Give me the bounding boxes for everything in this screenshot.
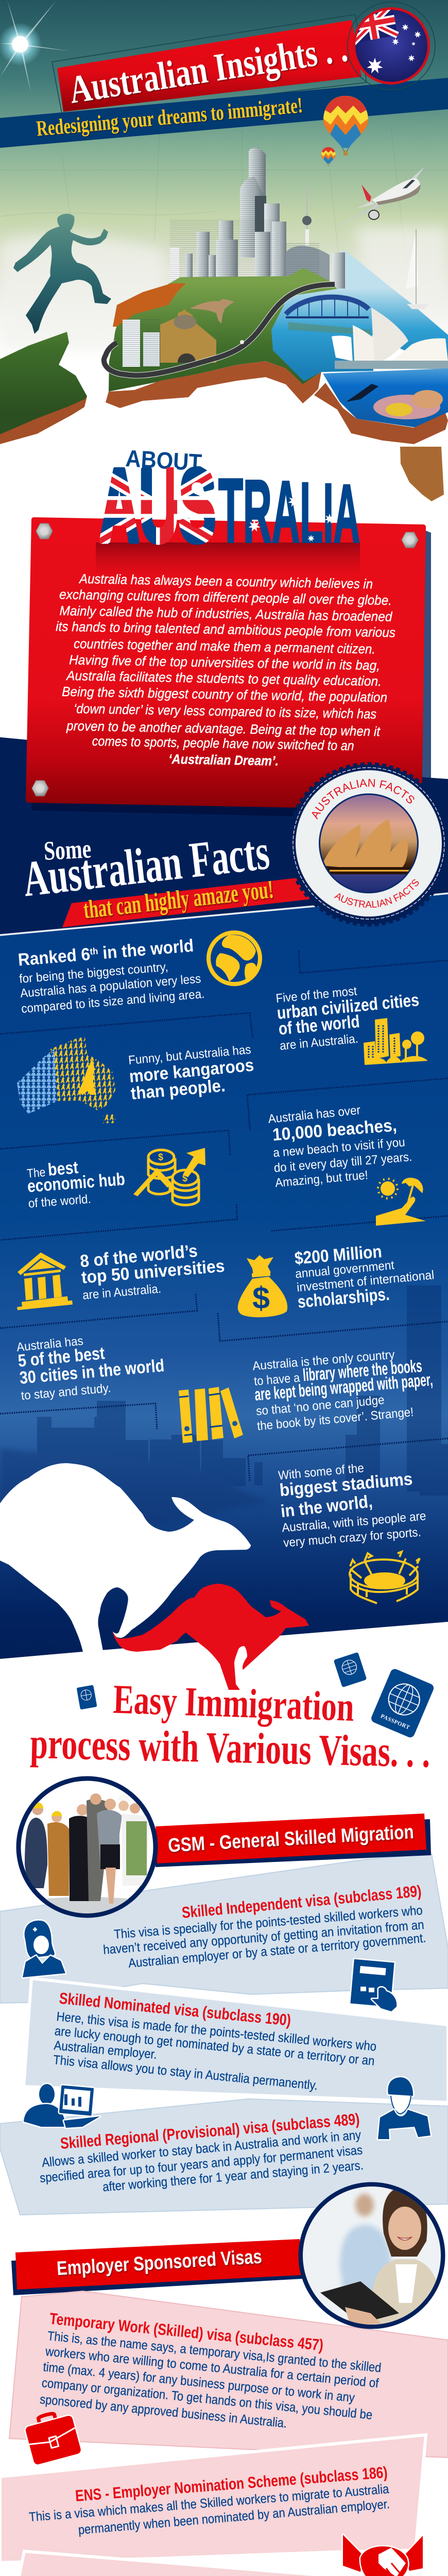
icon: coins with arrow: $	[158, 1152, 163, 1162]
about Australia paragraph: ‘down under’ is very less compared to its size, which has	[74, 701, 376, 722]
plate shadow	[31, 793, 425, 819]
icon: handshake	[343, 2535, 423, 2576]
panel: skilled nominated visa: Australian employer.	[53, 2038, 158, 2062]
icon: money bag: $	[252, 1281, 270, 1315]
subtitle text: Redesigning your dreams to immigrate!	[36, 94, 304, 141]
fact: urban cities: of the world	[278, 1012, 360, 1039]
fact: biggest stadiums: very much crazy for sports.	[283, 1526, 422, 1550]
passport icon small right	[334, 1652, 367, 1687]
fact: best economic hub: The	[26, 1165, 46, 1181]
about Australia paragraph: comes to sports, people have now switched to an	[92, 733, 354, 753]
panel: skilled nominated visa: Here, this visa is made for the points-tested skilled workers who	[56, 2009, 377, 2054]
GSM ribbon	[156, 1814, 431, 1867]
fact: biggest stadiums: in the world,	[280, 1492, 373, 1521]
fact: urban cities: are in Australia.	[279, 1032, 359, 1053]
fact: top 50 universities: are in Australia.	[82, 1282, 162, 1302]
icon: briefcase	[23, 2409, 82, 2465]
icon: stadium	[350, 1552, 420, 1603]
sun flare	[0, 0, 70, 93]
underwater reef	[323, 368, 448, 428]
icon: city	[364, 1018, 428, 1065]
fact: ranked 6th: Ranked 6	[18, 944, 96, 970]
Some: Some	[43, 834, 92, 866]
icon: books	[179, 1387, 243, 1443]
panel: temporary work visa: workers who are willing to come to Australia for a certain period of	[44, 2344, 380, 2391]
fact: 10,000 beaches: a new beach to visit if you	[272, 1136, 406, 1160]
fact: best economic hub	[26, 1148, 205, 1211]
employer circular photo: businesswoman	[301, 2184, 443, 2329]
passport icon large	[370, 1668, 435, 1739]
stamp text bottom: AUSTRALIAN FACTS	[334, 879, 419, 908]
stamp text top: AUSTRALIAN FACTS	[312, 779, 414, 819]
fact: 10,000 beaches	[267, 1103, 426, 1226]
employer sponsored ribbon	[11, 2239, 304, 2295]
title text: Australian Insights . .	[66, 26, 350, 112]
panel: about Australia text plate	[26, 517, 426, 810]
about Australia paragraph: its hands to bring talented and ambitious people from various	[56, 619, 395, 640]
fact: biggest stadiums: biggest stadiums	[279, 1469, 413, 1500]
icon: coins with arrow	[133, 1148, 205, 1205]
fact: wrapped library books: so that ‘no one can judge	[255, 1393, 385, 1418]
AUSTRALIA flag lettering: TRALIA	[218, 460, 360, 562]
about Australia paragraph: Being the sixth biggest country of the world, the population	[62, 684, 387, 705]
fact: top 50 universities	[17, 1241, 226, 1310]
about Australia paragraph: Mainly called the hub of industries, Australia has broadened	[59, 603, 393, 624]
fact: ranked 6th: in the world	[97, 936, 195, 963]
panel: ENS visa	[0, 2435, 426, 2563]
icon: nurse	[23, 1921, 65, 1977]
about Australia paragraph: countries together and make them a permanent citizen.	[74, 636, 375, 657]
icon: globe	[206, 930, 262, 986]
fact: wrapped library books: Australia is the only country	[252, 1348, 395, 1373]
red ribbon with subheading	[62, 874, 312, 927]
Sydney opera house	[332, 308, 448, 369]
Australian Facts: Australian Facts	[20, 824, 272, 907]
red title ribbon	[57, 20, 361, 112]
panel: skilled nominated visa: are lucky enough to get nominated by a state or a territory or an	[54, 2024, 375, 2069]
fact: urban cities	[275, 984, 428, 1065]
panel: RSMS visa	[0, 2551, 448, 2576]
facts heading	[20, 824, 312, 927]
fact: 200 million scholarships: scholarships.	[297, 1284, 390, 1312]
fact: best economic hub: best	[47, 1158, 79, 1180]
title band with flag	[0, 2, 448, 148]
about Australia paragraph: proven to be another advantage. Being at the top when it	[66, 718, 381, 739]
reflection of title on plate	[96, 543, 360, 580]
Tasmania	[400, 447, 444, 501]
fact: more kangaroos	[17, 1037, 255, 1123]
icon: construction worker	[378, 2077, 430, 2139]
about Australia paragraph	[56, 571, 395, 769]
fact: 10,000 beaches: 10,000 beaches,	[272, 1115, 398, 1145]
about Australia paragraph: exchanging cultures from different people all over the globe.	[59, 586, 392, 608]
stamp photo: opera house at dusk	[319, 793, 418, 894]
fact: ranked 6th	[18, 930, 262, 1016]
about Australia paragraph: Australia has always been a country which believes in	[78, 571, 373, 591]
about Australia paragraph: ‘Australian Dream’.	[168, 751, 279, 769]
red kangaroo silhouette	[113, 1584, 309, 1690]
panel: ENS visa: permanently when been nominated by an Australian employer.	[78, 2497, 390, 2537]
white kangaroo silhouette	[0, 1463, 251, 1652]
red ribbon with subheading: that can highly amaze you!	[82, 874, 275, 924]
Australia land map main piece	[104, 268, 448, 444]
fact: biggest stadiums	[278, 1461, 427, 1603]
panel: skilled nominated visa: This visa allows you to stay in Australia permanently.	[53, 2053, 318, 2093]
about Australia paragraph: Having five of the top universities of the world in its bag,	[69, 652, 380, 673]
Uluru rock	[113, 283, 186, 327]
flag badge	[348, 2, 435, 90]
panel: skilled regional visa	[0, 2099, 448, 2215]
fact: 10,000 beaches: Amazing, but true!	[274, 1168, 369, 1190]
blue subtitle band	[0, 78, 448, 148]
section heading: easy immigration	[30, 1677, 431, 1777]
bolts	[32, 523, 418, 796]
passport icon large: PASSPORT	[380, 1713, 411, 1731]
panel: temporary work visa: Temporary Work (Skilled) visa (subclass 457)	[49, 2310, 324, 2354]
fact: top 50 universities: 8 of the world’s	[79, 1241, 198, 1272]
Flinders street station	[123, 309, 216, 367]
panel: temporary work visa: This is, as the name says, a temporary visa,Is granted to the skilled	[47, 2329, 382, 2375]
employer sponsored ribbon: Employer Sponsored Visas	[56, 2246, 263, 2280]
kangaroo on grass	[190, 299, 234, 324]
panel: ENS visa: This is a visa which makes all the Skilled workers to migrate to Australia	[28, 2482, 389, 2524]
panel: temporary work visa: sponsored by any approved business in Australia.	[39, 2392, 287, 2431]
panel: skilled regional visa: Allows a skilled worker to stay back in Australia and work in any	[41, 2128, 362, 2170]
fact: biggest stadiums: Australia, with its people are	[281, 1509, 427, 1535]
GSM circular photo: skilled workers group	[15, 1778, 160, 1916]
fact: 200 million scholarships: $200 Million	[294, 1242, 383, 1268]
airplane	[329, 167, 424, 230]
white lower page background	[0, 1622, 448, 2576]
fact: more kangaroos: more kangaroos	[128, 1055, 255, 1087]
fact: urban cities: Five of the most	[275, 984, 358, 1006]
fact: ranked 6th: compared to its size and living area.	[21, 987, 205, 1016]
fact: 200 million scholarships: investment of international	[296, 1268, 435, 1295]
fact: 10,000 beaches: do it every day till 27 years.	[273, 1150, 412, 1175]
fact: wrapped library books: the book by its cover’. Strange!	[256, 1405, 414, 1433]
fact: best economic hub: of the world.	[28, 1192, 92, 1211]
fact: 30 best cities: to stay and study.	[21, 1381, 111, 1403]
fact: more kangaroos: than people.	[130, 1076, 226, 1104]
panel: skilled nominated visa	[24, 1978, 448, 2103]
fact: wrapped library books: to have a	[253, 1371, 301, 1388]
fact: 200 million scholarships: annual government	[295, 1258, 395, 1281]
section heading: easy immigration: Easy Immigration	[112, 1677, 355, 1730]
about Australia paragraph: Australia facilitates the students to get quality education.	[65, 668, 382, 689]
fact: 30 best cities	[16, 1334, 165, 1403]
icon: university building	[17, 1252, 73, 1310]
panel: skilled regional visa: Skilled Regional (Provisional) visa (subclass 489)	[60, 2110, 360, 2153]
hero background sky	[0, 0, 448, 350]
city skyline	[170, 148, 345, 289]
fact: best economic hub: economic hub	[27, 1170, 126, 1196]
icon: money bag	[238, 1255, 287, 1317]
fact: more kangaroos: Funny, but Australia has	[128, 1043, 252, 1067]
panel: skilled nominated visa: Skilled Nominated visa (subclass 190)	[58, 1989, 292, 2029]
fact: ranked 6th: th	[90, 946, 98, 957]
harbour bay water and bridge	[271, 289, 373, 381]
fact: 200 million scholarships	[238, 1242, 435, 1317]
hot air balloon large	[322, 95, 371, 156]
hot air balloon small	[321, 147, 336, 166]
icon: computer user	[24, 2084, 100, 2128]
icon: coins with arrow: $	[182, 1173, 187, 1183]
fact: 30 best cities: 30 cities in the world	[19, 1356, 165, 1388]
fact: 30 best cities: 5 of the best	[17, 1344, 106, 1371]
dotted separators	[0, 951, 448, 1482]
red earth south east coast	[314, 383, 448, 444]
navy section behind facts heading	[0, 737, 448, 935]
panel: temporary work visa	[9, 2291, 448, 2458]
ocean strip and sailboat	[330, 229, 448, 371]
ABOUT heading: ABOUT	[125, 445, 202, 476]
fact: 10,000 beaches: Australia has over	[267, 1103, 361, 1126]
Australian facts stamp badge	[292, 762, 445, 926]
passport icon small left	[77, 1685, 97, 1709]
panel: temporary work visa: company or organization. To get hands on this visa, you should be	[41, 2376, 373, 2422]
panel: temporary work visa: time (max. 4 years) for any business purpose or to work in any	[42, 2360, 356, 2405]
icon: touch tablet	[350, 1959, 397, 2011]
red earth cliff	[106, 361, 321, 408]
fact: wrapped library books	[179, 1348, 434, 1443]
city photo backdrop	[0, 1285, 448, 1525]
fact: biggest stadiums: With some of the	[278, 1461, 365, 1483]
AUSTRALIA flag lettering: AUS	[99, 448, 216, 563]
Australia land map western piece	[0, 332, 87, 444]
fact: ranked 6th: Australia has a population very less	[20, 972, 201, 1001]
winding road	[104, 284, 335, 376]
fact: 30 best cities: Australia has	[16, 1334, 84, 1354]
man silhouette	[13, 214, 111, 334]
icon: beach chair, sun and umbrella	[376, 1178, 426, 1226]
fact: urban cities: urban civilized cities	[276, 990, 420, 1023]
white divider and blue facts section	[0, 893, 448, 1659]
fact: top 50 universities: top 50 universities	[81, 1256, 226, 1287]
icon: Australia map of kangaroos and people	[17, 1037, 115, 1123]
panel: skilled independent visa	[0, 1854, 448, 2003]
fact: ranked 6th: for being the biggest country,	[19, 960, 169, 986]
panel: skilled regional visa: after working there for 1 year and staying in 2 years.	[102, 2158, 364, 2194]
panel: skilled regional visa: specified area for up to four years and apply for permanent visas	[39, 2143, 363, 2185]
about Australia plate side shadow	[26, 531, 431, 810]
